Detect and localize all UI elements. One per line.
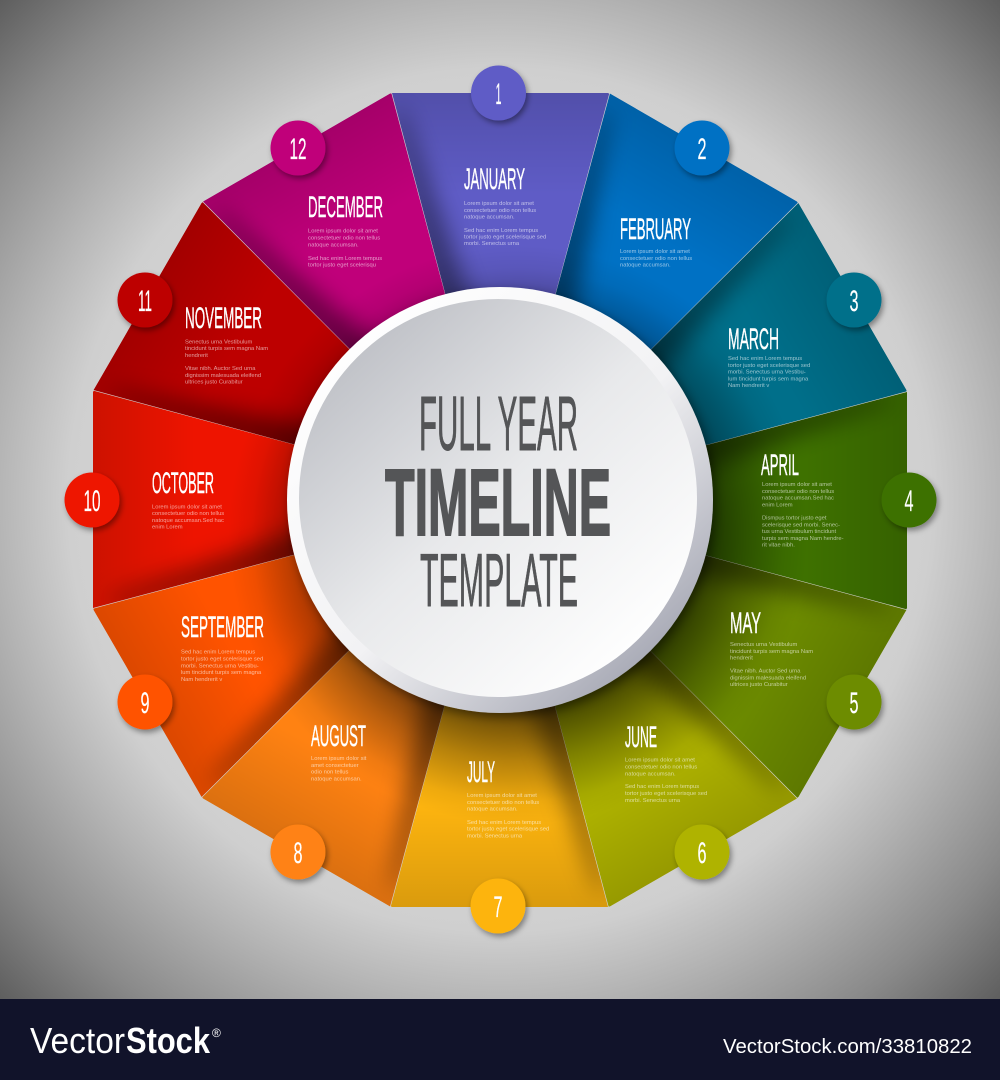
footer logo [30,1020,221,1061]
text: FULL YEAR [419,381,578,467]
center disc [287,287,713,713]
panel: December [270,120,383,269]
footer bar [0,999,1000,1080]
wedge: March [651,203,906,445]
text: December: consectetuer odio non tellus [308,236,380,242]
text: August: natoque accumsan. [311,776,362,782]
text: April: enim Lorem [762,502,793,508]
text: July: natoque accumsan. [467,806,518,812]
badge: 2 [674,120,730,176]
text: March [728,356,810,389]
panel: March: MARCH [728,323,779,356]
text: November: dignissim malesuada eleifend [185,373,261,379]
badge: 5: 5 [850,687,858,720]
text: October [152,504,224,531]
wedge: July [390,706,608,907]
text: December: tortor justo eget scelerisqu [308,263,376,269]
text: November: Senectus urna Vestibulum [185,339,253,345]
badge: 10: 10 [84,485,100,518]
badge: 1 [471,66,526,120]
panel: May: MAY [730,607,761,640]
panel: September [118,611,264,730]
text: January: Sed hac enim Lorem tempus [464,228,538,234]
badge: 12: 12 [290,133,306,166]
badge: 9: 9 [140,687,150,720]
text: DECEMBER [308,191,383,224]
badge: 1: 1 [496,78,502,111]
badge: 12 [270,120,326,176]
text: March: Sed hac enim Lorem tempus [728,356,802,362]
panel: June: JUNE [625,721,657,754]
text: March: morbi. Senectus urna Vestibu- [728,370,806,376]
panel: July [467,756,549,934]
text: November: tincidunt turpis sem magna Nam [185,346,268,352]
text: July: consectetuer odio non tellus [467,800,539,806]
panel: January: JANUARY [464,163,525,196]
wedge: October [93,390,294,608]
text: April: consectetuer odio non tellus [762,489,834,495]
text: April: rit vitae nibh. [762,543,795,549]
text: AUGUST [311,720,366,753]
text: September: Sed hac enim Lorem tempus [181,650,255,656]
text: March: tortor justo eget scelerisque sed [728,363,810,369]
text: April: scelerisque sed morbi. Senec- [762,522,840,528]
panel: May [730,607,882,730]
text: March: lum tincidunt turpis sem magna [728,376,809,382]
text: September [181,650,263,683]
text: July: Sed hac enim Lorem tempus [467,820,541,826]
text: September: tortor justo eget scelerisque sed [181,656,263,662]
text: July: tortor justo eget scelerisque sed [467,827,549,833]
badge: 5 [826,674,882,730]
panel: July: JULY [467,756,495,789]
badge: 2: 2 [698,133,706,166]
wedge: December [203,94,445,349]
badge: 3: 3 [850,285,858,318]
text: OCTOBER [152,467,214,500]
badge: 8: 8 [294,837,302,870]
text: September: lum tincidunt turpis sem magna [181,670,262,676]
text: June: natoque accumsan. [625,771,676,777]
text: August [311,756,367,782]
text: August: Lorem ipsum dolor sit [311,756,367,762]
badge: 6: 6 [698,837,706,870]
badge: 6 [674,824,730,880]
footer logo: ® [212,1026,221,1040]
badge: 11: 11 [138,285,152,318]
panel: March [728,272,882,389]
text: September: Nam hendrerit v [181,677,222,683]
panel: January [464,66,546,247]
text: August: amet consectetuer [311,763,359,769]
text: January: consectetuer odio non tellus [464,208,536,214]
text: March: Nam hendrerit v [728,383,769,389]
panel: June [625,721,730,880]
text: July [467,793,549,840]
badge: 4 [882,472,936,528]
text: June: tortor justo eget scelerisque sed [625,791,707,797]
text: September: morbi. Senectus urna Vestibu- [181,663,259,669]
wedge: September [94,555,349,797]
text: October: natoque accumsan.Sed hac [152,518,224,524]
text: October: enim Lorem [152,525,183,531]
text: January: natoque accumsan. [464,215,515,221]
title: TIMELINE [385,450,611,556]
wedge: November [94,202,350,444]
panel: February [620,120,730,268]
text: November: hendrerit [185,353,208,359]
text: January [464,201,546,247]
badge: 9 [118,674,172,730]
text: May: tincidunt turpis sem magna Nam [730,649,813,655]
panel: October [64,467,224,531]
text: May: dignissim malesuada eleifend [730,675,806,681]
text: April: Dismpus tortor justo eget [762,516,827,522]
badge: 4: 4 [904,485,914,518]
wedge: May [650,556,906,798]
text: SEPTEMBER [181,611,264,644]
text: November: ultrices justo Curabitur [185,380,243,386]
footer url: VectorStock.com/33810822 [723,1036,972,1058]
wheel wedges [76,76,924,924]
text: January: Lorem ipsum dolor sit amet [464,201,534,207]
text: December [308,229,382,269]
badge: 8 [270,824,326,880]
wedge: August [202,650,444,906]
text: June [625,758,707,804]
text: June: consectetuer odio non tellus [625,764,697,770]
text: February: natoque accumsan. [620,262,671,268]
text: February: Lorem ipsum dolor sit amet [620,249,690,255]
text: November [185,339,268,386]
text: May [730,642,813,688]
panel: February: FEBRUARY [620,213,691,246]
badge: 3 [826,272,882,328]
wedge: April [706,392,907,610]
text: April: natoque accumsan.Sed hac [762,496,834,502]
text: February: consectetuer odio non tellus [620,256,692,262]
badge: 7: 7 [494,891,502,924]
text: June: Lorem ipsum dolor sit amet [625,758,695,764]
badge: 11 [118,272,172,328]
text: April [762,482,844,549]
text: December: Lorem ipsum dolor sit amet [308,229,378,235]
text: January: morbi. Senectus urna [464,241,520,247]
panel: April [761,449,936,549]
text: December: natoque accumsan. [308,242,359,248]
footer logo: Vector [30,1020,125,1061]
text: April: turpis sem magna Nam hendre- [762,536,844,542]
text: June: Sed hac enim Lorem tempus [625,784,699,790]
panel: August [270,720,367,880]
text: July: morbi. Senectus urna [467,834,523,840]
panel: November [118,272,268,386]
text: June: morbi. Senectus urna [625,798,681,804]
text: May: Vitae nibh. Auctor Sed urna [730,669,801,675]
text: February [620,249,692,268]
badge: 10 [64,472,120,528]
text: TEMPLATE [420,538,578,622]
text: December: Sed hac enim Lorem tempus [308,256,382,262]
text: NOVEMBER [185,302,262,335]
wedge: January [392,93,610,294]
panel: April: APRIL [761,449,799,482]
footer logo: Stock [126,1020,211,1061]
wedge: February [556,94,798,350]
text: April: Lorem ipsum dolor sit amet [762,482,832,488]
text: January: tortor justo eget scelerisque sed [464,234,546,240]
text: July: Lorem ipsum dolor sit amet [467,793,537,799]
text: May: hendrerit [730,656,753,662]
text: October: Lorem ipsum dolor sit amet [152,504,222,510]
wedge: June [555,651,797,906]
text: October: consectetuer odio non tellus [152,511,224,517]
badge: 7 [470,878,526,934]
text: November: Vitae nibh. Auctor Sed urna [185,366,256,372]
text: May: Senectus urna Vestibulum [730,642,798,648]
text: August: odio non tellus [311,770,348,776]
text: May: ultrices justo Curabitur [730,682,788,688]
text: April: tus urna Vestibulum tincidunt [762,529,837,535]
title [385,381,611,622]
